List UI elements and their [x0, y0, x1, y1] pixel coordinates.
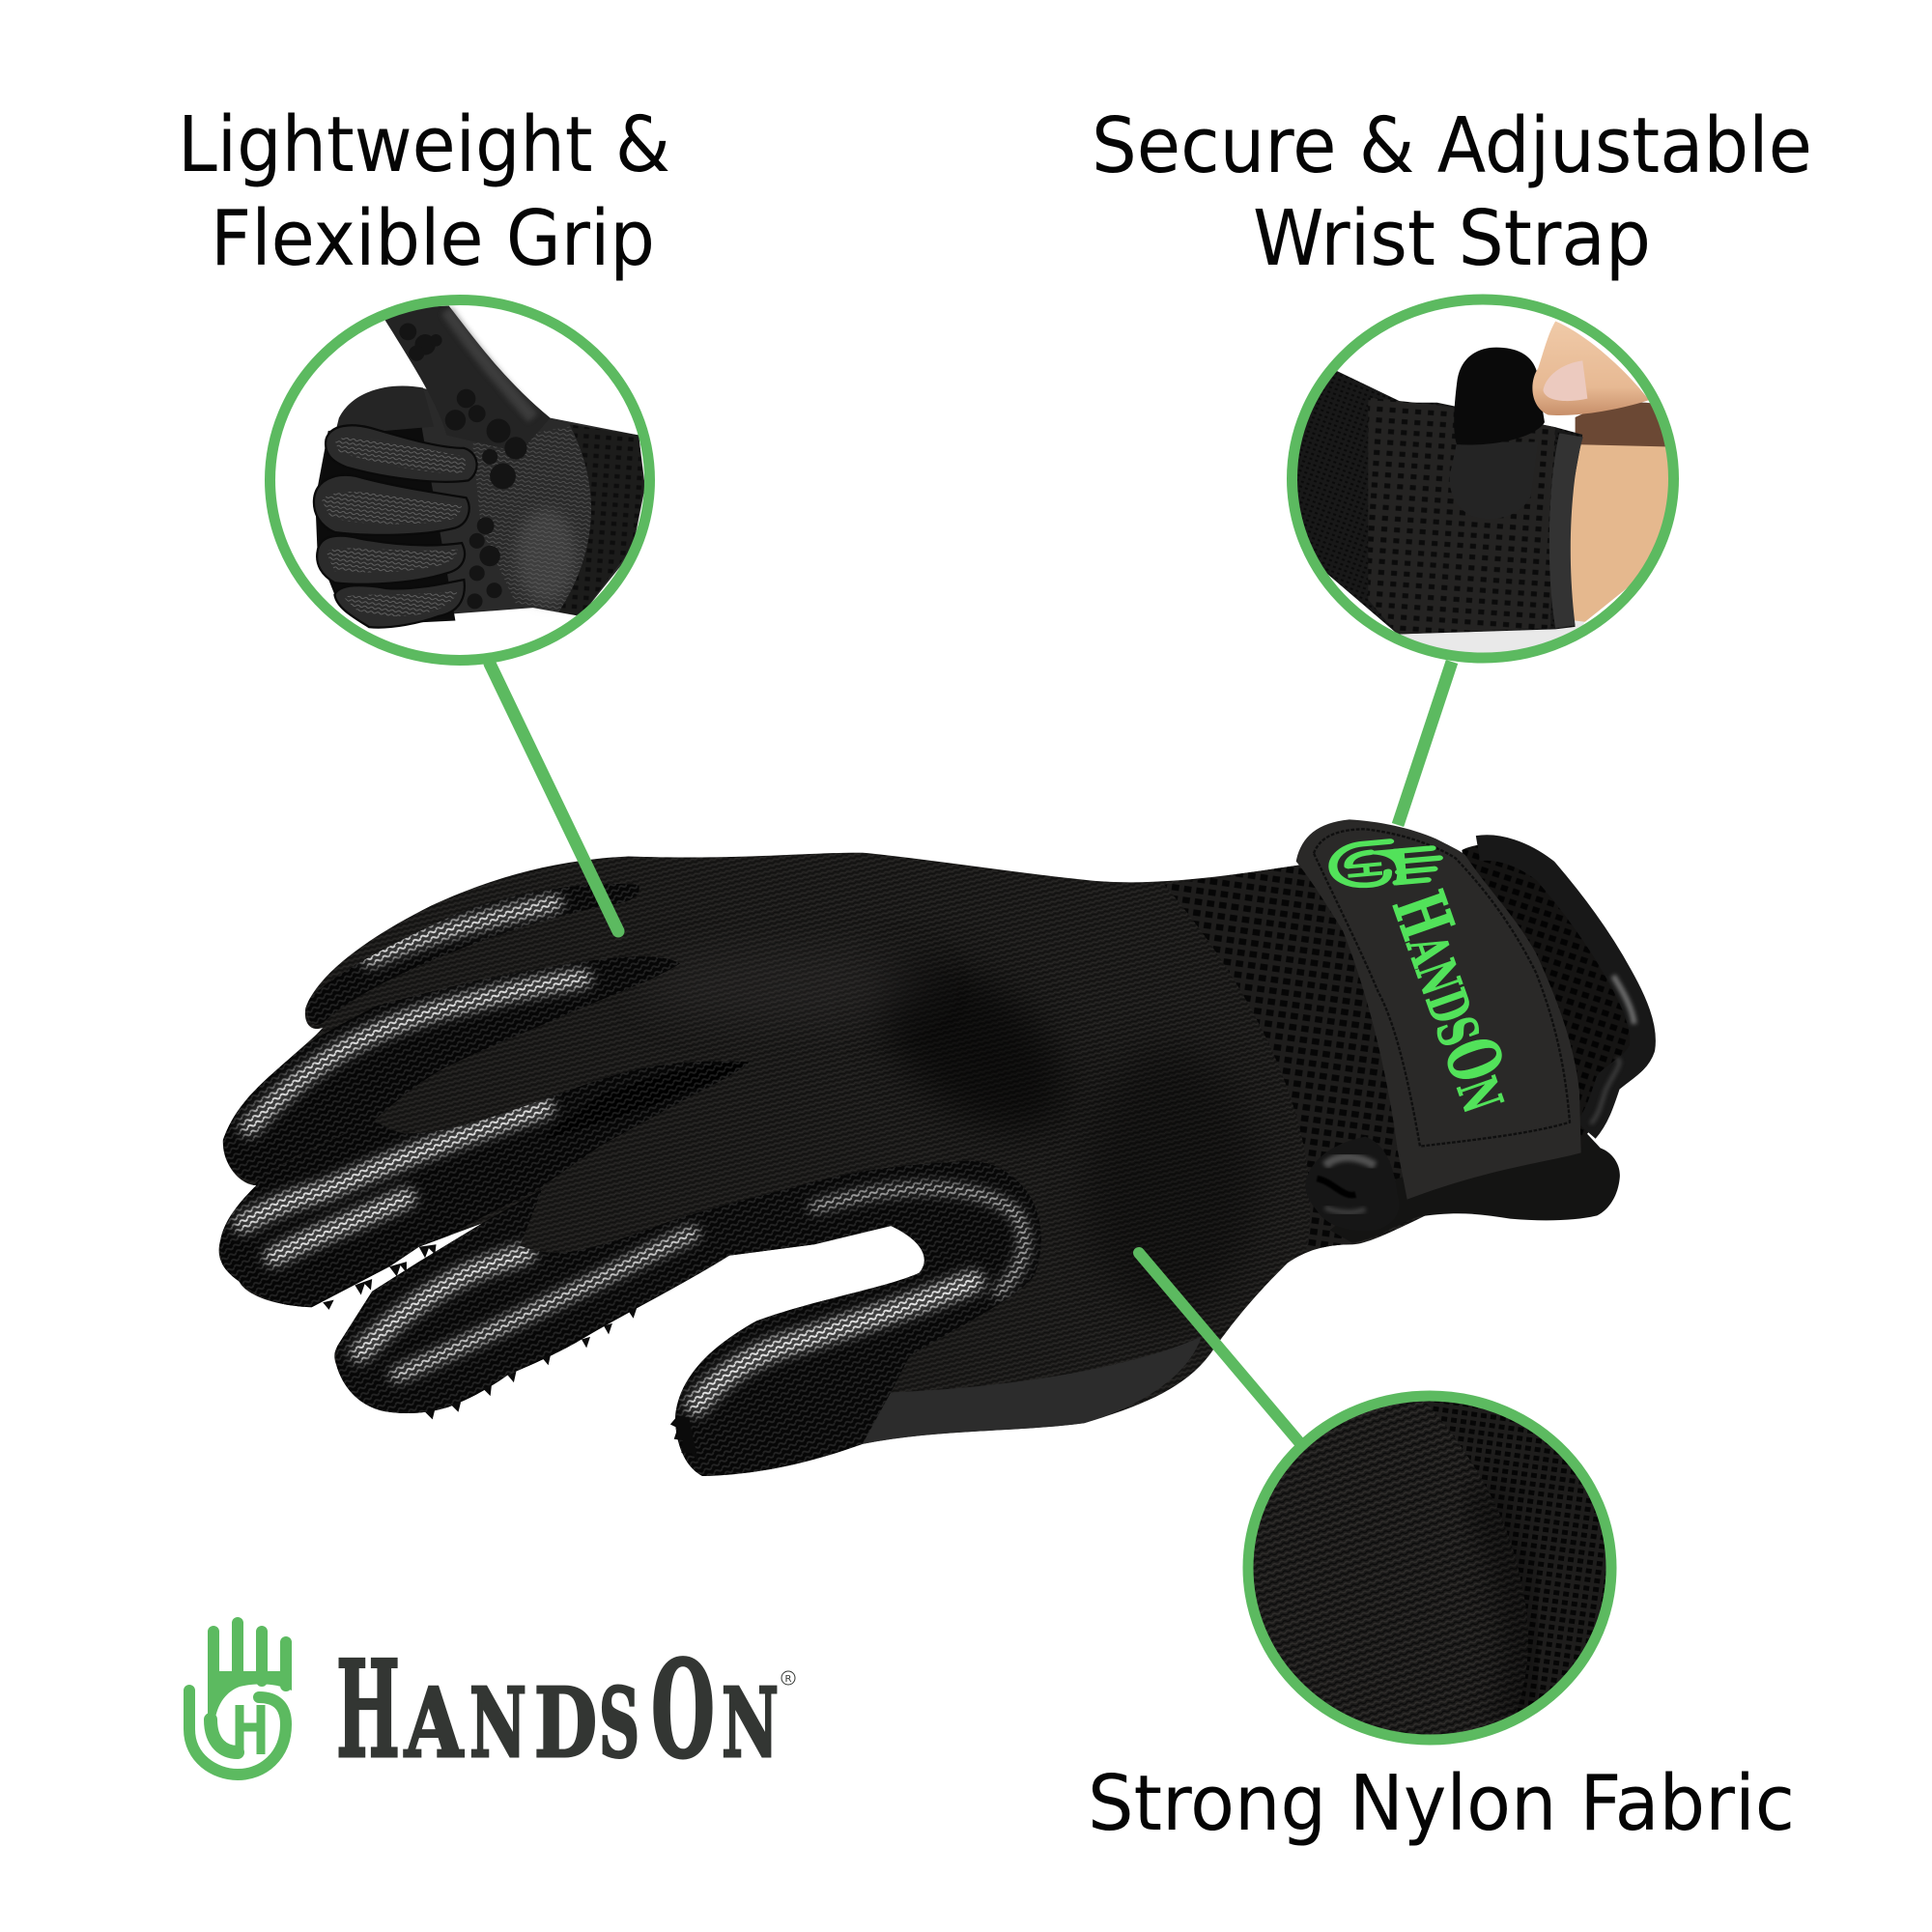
wrist cuff and palm — [412, 387, 645, 616]
fist fingers — [314, 425, 477, 628]
heading: Secure and Adjustable Wrist Strap: Secure & Adjustable — [1092, 101, 1812, 190]
finger coating: little finger — [307, 884, 639, 1025]
finger coating: ring finger — [223, 956, 680, 1180]
glove hand body, fabric — [218, 852, 1426, 1476]
grip spikes — [399, 323, 527, 609]
logo icon: green hand — [189, 1623, 292, 1775]
raised velcro tab — [1454, 348, 1545, 444]
finger texture — [322, 438, 466, 616]
sleeve — [1294, 371, 1582, 635]
lower palm coating sheen — [863, 1337, 1202, 1444]
finger curl — [336, 386, 423, 431]
callout line: fabric — [1139, 1253, 1299, 1442]
strap stitching — [1314, 829, 1570, 1147]
strap knob — [1305, 1137, 1399, 1231]
heading: Lightweight and Flexible Grip: Flexible Grip — [211, 194, 655, 283]
lower velcro tab — [1450, 442, 1538, 519]
callout line: strap — [1398, 662, 1452, 825]
logo wordmark — [336, 1631, 795, 1788]
thumb holding the tab — [1532, 322, 1649, 415]
strap logo icon — [1331, 838, 1440, 891]
finger coating: middle finger — [219, 1062, 750, 1307]
arm skin — [1563, 444, 1674, 622]
mesh zone — [1420, 1391, 1623, 1748]
logo wordmark: N — [722, 1668, 779, 1779]
logo wordmark: D — [534, 1668, 597, 1779]
shadow under sleeve — [1398, 619, 1585, 654]
wrist mesh — [1165, 866, 1403, 1250]
back loop mesh — [1462, 844, 1655, 1156]
circle outline: fabric — [1248, 1396, 1611, 1740]
logo wordmark: S — [599, 1668, 639, 1779]
lower dark finger — [1576, 403, 1674, 452]
glove wrist strap assembly — [1296, 819, 1655, 1243]
lower wrist band — [1330, 1123, 1620, 1243]
dark slot between fingers — [542, 1062, 750, 1140]
logo wordmark: H — [336, 1631, 400, 1788]
strap band — [1296, 819, 1581, 1200]
coating on index finger and thumb — [336, 1161, 1041, 1476]
cuff band — [1549, 433, 1583, 628]
strap wordmark: HANDSON — [1376, 881, 1530, 1122]
logo wordmark: R — [785, 1674, 792, 1685]
dark backing between fingers — [315, 422, 455, 625]
gloss glow and ripple texture — [220, 884, 1041, 1476]
back loop rim — [1478, 848, 1643, 1130]
logo wordmark: O — [651, 1631, 715, 1788]
thumb — [384, 306, 551, 452]
circle outline: strap — [1293, 299, 1673, 658]
inset: wrist strap close-up — [1294, 322, 1674, 654]
glove grip spikes — [323, 1244, 698, 1463]
inset: thumbs-up glove — [314, 306, 645, 628]
logo wordmark: A — [404, 1668, 465, 1779]
circle outline: grip — [270, 299, 649, 661]
heading: Lightweight and Flexible Grip — [178, 100, 670, 283]
main glove photo — [218, 852, 1426, 1476]
logo wordmark: N — [469, 1668, 526, 1779]
heading: Strong Nylon Fabric: Strong Nylon Fabric — [1088, 1759, 1795, 1848]
heading: Secure and Adjustable Wrist Strap: Wrist Strap — [1253, 194, 1651, 283]
inset: nylon fabric close-up — [1236, 1391, 1623, 1748]
callout line: grip — [490, 664, 618, 931]
heading: Secure and Adjustable Wrist Strap — [1092, 101, 1812, 283]
heading: Lightweight and Flexible Grip: Lightweight & — [178, 100, 670, 189]
fold shading — [1478, 1488, 1520, 1739]
